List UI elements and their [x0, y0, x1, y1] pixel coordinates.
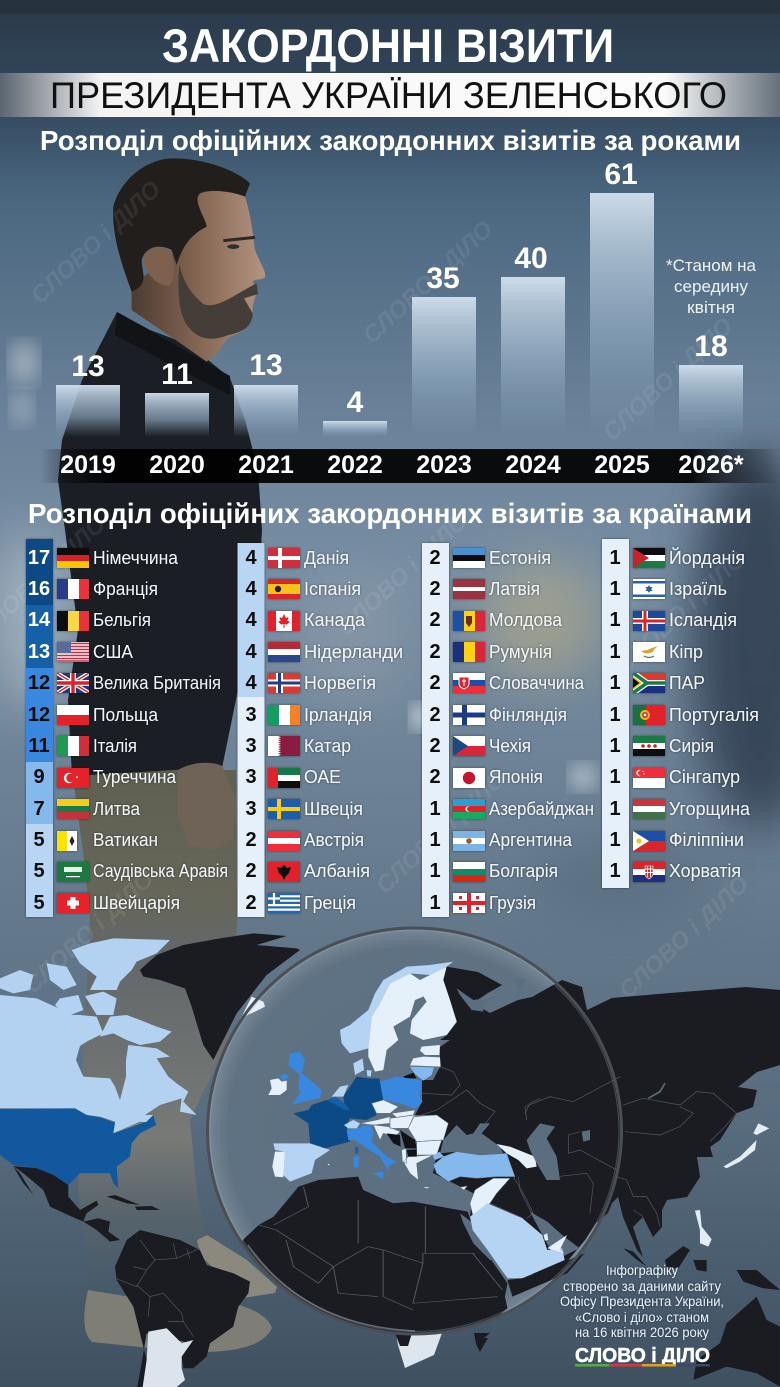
- row: Japan: 2: [429, 766, 441, 788]
- values: 18: [694, 330, 728, 363]
- row: Estonia: [429, 547, 551, 569]
- row: Finland: Фінляндія: [489, 705, 567, 725]
- bar chart: visits by year: [40, 158, 780, 483]
- credits: [560, 1262, 724, 1340]
- row: Greece: Греція: [304, 893, 356, 913]
- row: Azerbaijan: Азербайджан: [489, 799, 594, 819]
- watermarks: СЛОВО і ДІЛО: [19, 865, 160, 999]
- row: Greece: 2: [245, 892, 257, 914]
- row: Cyprus: 1: [609, 641, 621, 663]
- row: Denmark: 4: [245, 547, 257, 569]
- row: Israel: [609, 578, 727, 600]
- row: Belgium: [28, 609, 151, 631]
- row: Slovakia: [429, 672, 585, 694]
- row: South Africa: 1: [609, 672, 621, 694]
- row: Hungary: [609, 798, 751, 820]
- France: [293, 1100, 352, 1148]
- row: Japan: Японія: [489, 767, 543, 787]
- row: Croatia: [609, 860, 741, 882]
- row: Albania: 2: [245, 860, 257, 882]
- footnote: *Станом на: [666, 256, 757, 275]
- panel: countries column 1: [26, 539, 228, 917]
- row: Denmark: Данія: [304, 548, 349, 568]
- row: Austria: 2: [245, 829, 257, 851]
- row: Vatican: Ватикан: [93, 830, 158, 850]
- values: 61: [604, 158, 638, 191]
- row: Saudi Arabia: Саудівська Аравія: [93, 861, 228, 881]
- row: Poland: 12: [28, 704, 50, 726]
- row: Sweden: Швеція: [304, 799, 363, 819]
- map: Eurasia: [415, 966, 780, 1278]
- row: Finland: [429, 704, 567, 726]
- Italy: [347, 1123, 397, 1179]
- row: United Kingdom: Велика Британія: [93, 673, 221, 693]
- row: Ireland: 3: [245, 704, 257, 726]
- row: Sweden: [245, 798, 363, 820]
- credits: Інфографіку: [606, 1262, 678, 1278]
- watermarks: СЛОВО і ДІЛО: [26, 175, 167, 309]
- map: southern Africa: [396, 1333, 442, 1368]
- Norway: [340, 962, 453, 1053]
- row: Philippines: Філіппіни: [669, 830, 744, 850]
- Finland: [410, 967, 457, 1040]
- row: Norway: [245, 672, 376, 694]
- row: Saudi Arabia: 5: [33, 860, 45, 882]
- row: Moldova: 2: [429, 609, 441, 631]
- row: France: Франція: [93, 579, 158, 599]
- row: United Kingdom: 12: [28, 672, 50, 694]
- row: Spain: Іспанія: [304, 579, 361, 599]
- footnote: квітня: [687, 298, 735, 317]
- year labels: 2025: [594, 451, 650, 479]
- heading: by countries: Розподіл офіційних закордонних візитів за країнами: [28, 498, 752, 529]
- row: Romania: 2: [429, 641, 441, 663]
- row: Austria: Австрія: [304, 830, 364, 850]
- watermarks: СЛОВО і ДІЛО: [611, 545, 752, 679]
- row: Lithuania: 7: [33, 798, 45, 820]
- row: Turkey: 9: [33, 766, 45, 788]
- year labels: 2026*: [678, 451, 744, 479]
- Argentina: [143, 1328, 193, 1387]
- credits: створено за даними сайту: [563, 1278, 721, 1294]
- values: 4: [347, 386, 364, 419]
- Switzerland: [344, 1120, 360, 1128]
- USA: [0, 1108, 156, 1188]
- row: Czechia: Чехія: [489, 736, 531, 756]
- row: Syria: Сирія: [669, 736, 714, 756]
- row: Portugal: 1: [609, 704, 621, 726]
- row: Greece: [245, 892, 356, 914]
- footnote: середину: [674, 277, 748, 296]
- watermarks: СЛОВО і ДІЛО: [333, 507, 474, 641]
- row: Canada: [245, 609, 366, 631]
- Benelux: [327, 1097, 350, 1111]
- values: 13: [249, 349, 283, 382]
- row: Portugal: Португалія: [669, 705, 759, 725]
- row: Iceland: 1: [609, 609, 621, 631]
- row: Poland: [28, 704, 159, 726]
- row: Ireland: Ірландія: [304, 705, 372, 725]
- row: France: [28, 578, 158, 600]
- row: Georgia: [429, 892, 536, 914]
- values: [71, 158, 728, 419]
- map: Greenland: [140, 933, 300, 1060]
- row: Qatar: 3: [245, 735, 257, 757]
- credits: Офісу Президента України,: [560, 1293, 724, 1309]
- Caucasus: [497, 1144, 537, 1168]
- row: Canada: 4: [245, 609, 257, 631]
- row: Azerbaijan: [429, 798, 594, 820]
- map: Australasia: [623, 1123, 780, 1387]
- year labels: 2019: [60, 451, 116, 479]
- row: Latvia: 2: [429, 578, 441, 600]
- shirt: [58, 312, 262, 776]
- row: Austria: [245, 829, 364, 851]
- row: Spain: 4: [245, 578, 257, 600]
- Baltics: [410, 1045, 441, 1067]
- row: Ireland: [245, 704, 372, 726]
- row: Latvia: Латвія: [489, 579, 540, 599]
- watermarks: СЛОВО і ДІЛО: [598, 312, 739, 446]
- values: 11: [161, 358, 193, 391]
- row: Israel: Ізраїль: [669, 579, 727, 599]
- row: Germany: Німеччина: [93, 548, 179, 568]
- row: Romania: Румунія: [489, 642, 552, 662]
- row: Saudi Arabia: [33, 860, 228, 882]
- borders: [417, 1067, 540, 1218]
- values: 13: [71, 350, 105, 383]
- watermarks: СЛОВО і ДІЛО: [358, 215, 499, 349]
- row: Hungary: 1: [609, 798, 621, 820]
- row: Argentina: Аргентина: [489, 830, 573, 850]
- watermarks: [0, 175, 755, 1004]
- trousers: [72, 770, 237, 1297]
- row: Qatar: Катар: [304, 736, 351, 756]
- row: Cyprus: Кіпр: [669, 642, 703, 662]
- row: Jordan: Йорданія: [669, 547, 745, 568]
- subtitle band: ПРЕЗИДЕНТА УКРАЇНИ ЗЕЛЕНСЬКОГО: [50, 75, 727, 116]
- row: Georgia: 1: [429, 892, 441, 914]
- row: Vatican: [33, 829, 158, 851]
- row: Georgia: Грузія: [489, 893, 536, 913]
- world map: [0, 928, 780, 1387]
- row: France: 16: [28, 578, 50, 600]
- year labels: 2023: [416, 451, 472, 479]
- row: Netherlands: Нідерланди: [304, 642, 403, 662]
- row: Switzerland: [33, 892, 180, 914]
- row: Singapore: [609, 766, 740, 788]
- Levant: [470, 1178, 510, 1217]
- row: Denmark: [245, 547, 349, 569]
- panel: countries column 4: [602, 539, 759, 888]
- row: Japan: [429, 766, 543, 788]
- Central Europe light group: [327, 1100, 467, 1190]
- year labels: 2024: [505, 451, 561, 479]
- row: Israel: 1: [609, 578, 621, 600]
- years strip: [40, 449, 780, 483]
- logo: СЛОВО і ДІЛО: [575, 1345, 710, 1367]
- row: Italy: Італія: [93, 736, 137, 756]
- seas: [440, 978, 527, 1260]
- row: Romania: [429, 641, 552, 663]
- row: Poland: Польща: [93, 705, 159, 725]
- row: Switzerland: Швейцарія: [93, 893, 180, 913]
- row: Estonia: 2: [429, 547, 441, 569]
- panel: countries column 3: [422, 543, 594, 917]
- row: Qatar: [245, 735, 351, 757]
- row: Argentina: [429, 829, 573, 851]
- footnote: [666, 256, 757, 317]
- row: Spain: [245, 578, 361, 600]
- row: Syria: 1: [609, 735, 621, 757]
- United Kingdom: [280, 1052, 322, 1105]
- row: Italy: 11: [28, 735, 50, 757]
- row: USA: США: [93, 642, 133, 662]
- row: Azerbaijan: 1: [429, 798, 441, 820]
- row: USA: 13: [28, 641, 50, 663]
- shoes: [84, 1235, 277, 1352]
- row: Italy: [28, 735, 137, 757]
- row: Germany: [28, 547, 179, 569]
- year labels: 2021: [238, 451, 294, 479]
- Canada: [0, 938, 197, 1133]
- globe rim: [208, 928, 622, 1334]
- row: Hungary: Угорщина: [669, 799, 751, 819]
- row: Switzerland: 5: [33, 892, 45, 914]
- year labels: [60, 451, 744, 479]
- watermarks: СЛОВО і ДІЛО: [614, 870, 755, 1004]
- row: Bulgaria: 1: [429, 860, 441, 882]
- row: Albania: Албанія: [304, 861, 370, 881]
- row: Norway: 4: [245, 672, 257, 694]
- row: Iceland: [609, 609, 737, 631]
- row: Singapore: 1: [609, 766, 621, 788]
- Germany: [343, 1077, 383, 1120]
- Turkey: [433, 1152, 515, 1182]
- row: Iceland: Ісландія: [669, 610, 737, 630]
- year labels: 2022: [327, 451, 383, 479]
- row: United Kingdom: [28, 672, 221, 694]
- bars: [56, 193, 743, 437]
- row: Moldova: Молдова: [489, 610, 563, 630]
- Asia borders and lakes: [518, 1077, 737, 1227]
- row: Turkey: Туреччина: [93, 767, 177, 787]
- row: Slovakia: 2: [429, 672, 441, 694]
- row: Belgium: Бельгія: [93, 610, 151, 630]
- Mexico and Central America: [13, 1166, 160, 1242]
- hand: [178, 763, 236, 850]
- row: Sweden: 3: [245, 798, 257, 820]
- row: Albania: [245, 860, 370, 882]
- row: Canada: Канада: [304, 610, 366, 630]
- row: Latvia: [429, 578, 540, 600]
- Iceland: [240, 997, 265, 1018]
- row: Turkey: [33, 766, 177, 788]
- row: Argentina: 1: [429, 829, 441, 851]
- row: Syria: [609, 735, 714, 757]
- head: [113, 158, 265, 362]
- row: Jordan: [609, 547, 745, 569]
- row: Lithuania: Литва: [93, 799, 141, 819]
- values: 35: [426, 262, 460, 295]
- row: Germany: 17: [28, 547, 50, 569]
- Sweden: [368, 973, 423, 1072]
- person photo: [58, 158, 277, 1352]
- row: Moldova: [429, 609, 563, 631]
- watermarks: СЛОВО і ДІЛО: [371, 765, 512, 899]
- row: Estonia: Естонія: [489, 548, 551, 568]
- row: Slovakia: Словаччина: [489, 673, 585, 693]
- credits: на 16 квітня 2026 року: [575, 1324, 709, 1340]
- Poland: [380, 1077, 423, 1109]
- row: Bulgaria: Болгарія: [489, 861, 558, 881]
- row: Singapore: Сінгапур: [669, 767, 740, 787]
- row: Czechia: 2: [429, 735, 441, 757]
- credits: «Слово і діло» станом: [575, 1309, 709, 1325]
- Spain: [273, 1143, 330, 1182]
- row: Lithuania: [33, 798, 141, 820]
- row: USA: [28, 641, 133, 663]
- collar: [115, 312, 230, 395]
- row: UAE: [245, 766, 341, 788]
- Balkans dark: [387, 1130, 417, 1157]
- values: 40: [514, 242, 548, 275]
- year labels: 2020: [149, 451, 205, 479]
- row: Croatia: Хорватія: [669, 861, 741, 881]
- row: Philippines: [609, 829, 744, 851]
- Saudi Arabia and Gulf: [470, 1203, 585, 1297]
- Denmark: [353, 1058, 372, 1077]
- Ireland: [268, 1078, 287, 1095]
- row: Croatia: 1: [609, 860, 621, 882]
- row: Portugal: [609, 704, 759, 726]
- row: Bulgaria: [429, 860, 558, 882]
- heading: by years: Розподіл офіційних закордонних візитів за роками: [40, 125, 741, 156]
- row: Czechia: [429, 735, 531, 757]
- map: Africa: [242, 1176, 508, 1332]
- row: Norway: Норвегія: [304, 673, 376, 693]
- row: UAE: ОАЕ: [304, 767, 341, 787]
- row: Netherlands: [245, 641, 403, 663]
- map: globe lens: [208, 928, 622, 1334]
- row: Finland: 2: [429, 704, 441, 726]
- row: Vatican: 5: [33, 829, 45, 851]
- panel: countries column 2: [238, 543, 403, 917]
- map: the Americas: [0, 938, 250, 1387]
- map: Europe and Middle East: [240, 962, 540, 1260]
- row: Philippines: 1: [609, 829, 621, 851]
- title: ЗАКОРДОННІ ВІЗИТИ: [162, 19, 614, 72]
- Portugal: [272, 1152, 285, 1177]
- row: South Africa: [609, 672, 705, 694]
- South America: [115, 1230, 250, 1387]
- row: Belgium: 14: [28, 609, 51, 631]
- row: UAE: 3: [245, 766, 257, 788]
- row: Jordan: 1: [609, 547, 621, 569]
- row: Netherlands: 4: [245, 641, 257, 663]
- row: Cyprus: [609, 641, 703, 663]
- row: South Africa: ПАР: [669, 673, 705, 693]
